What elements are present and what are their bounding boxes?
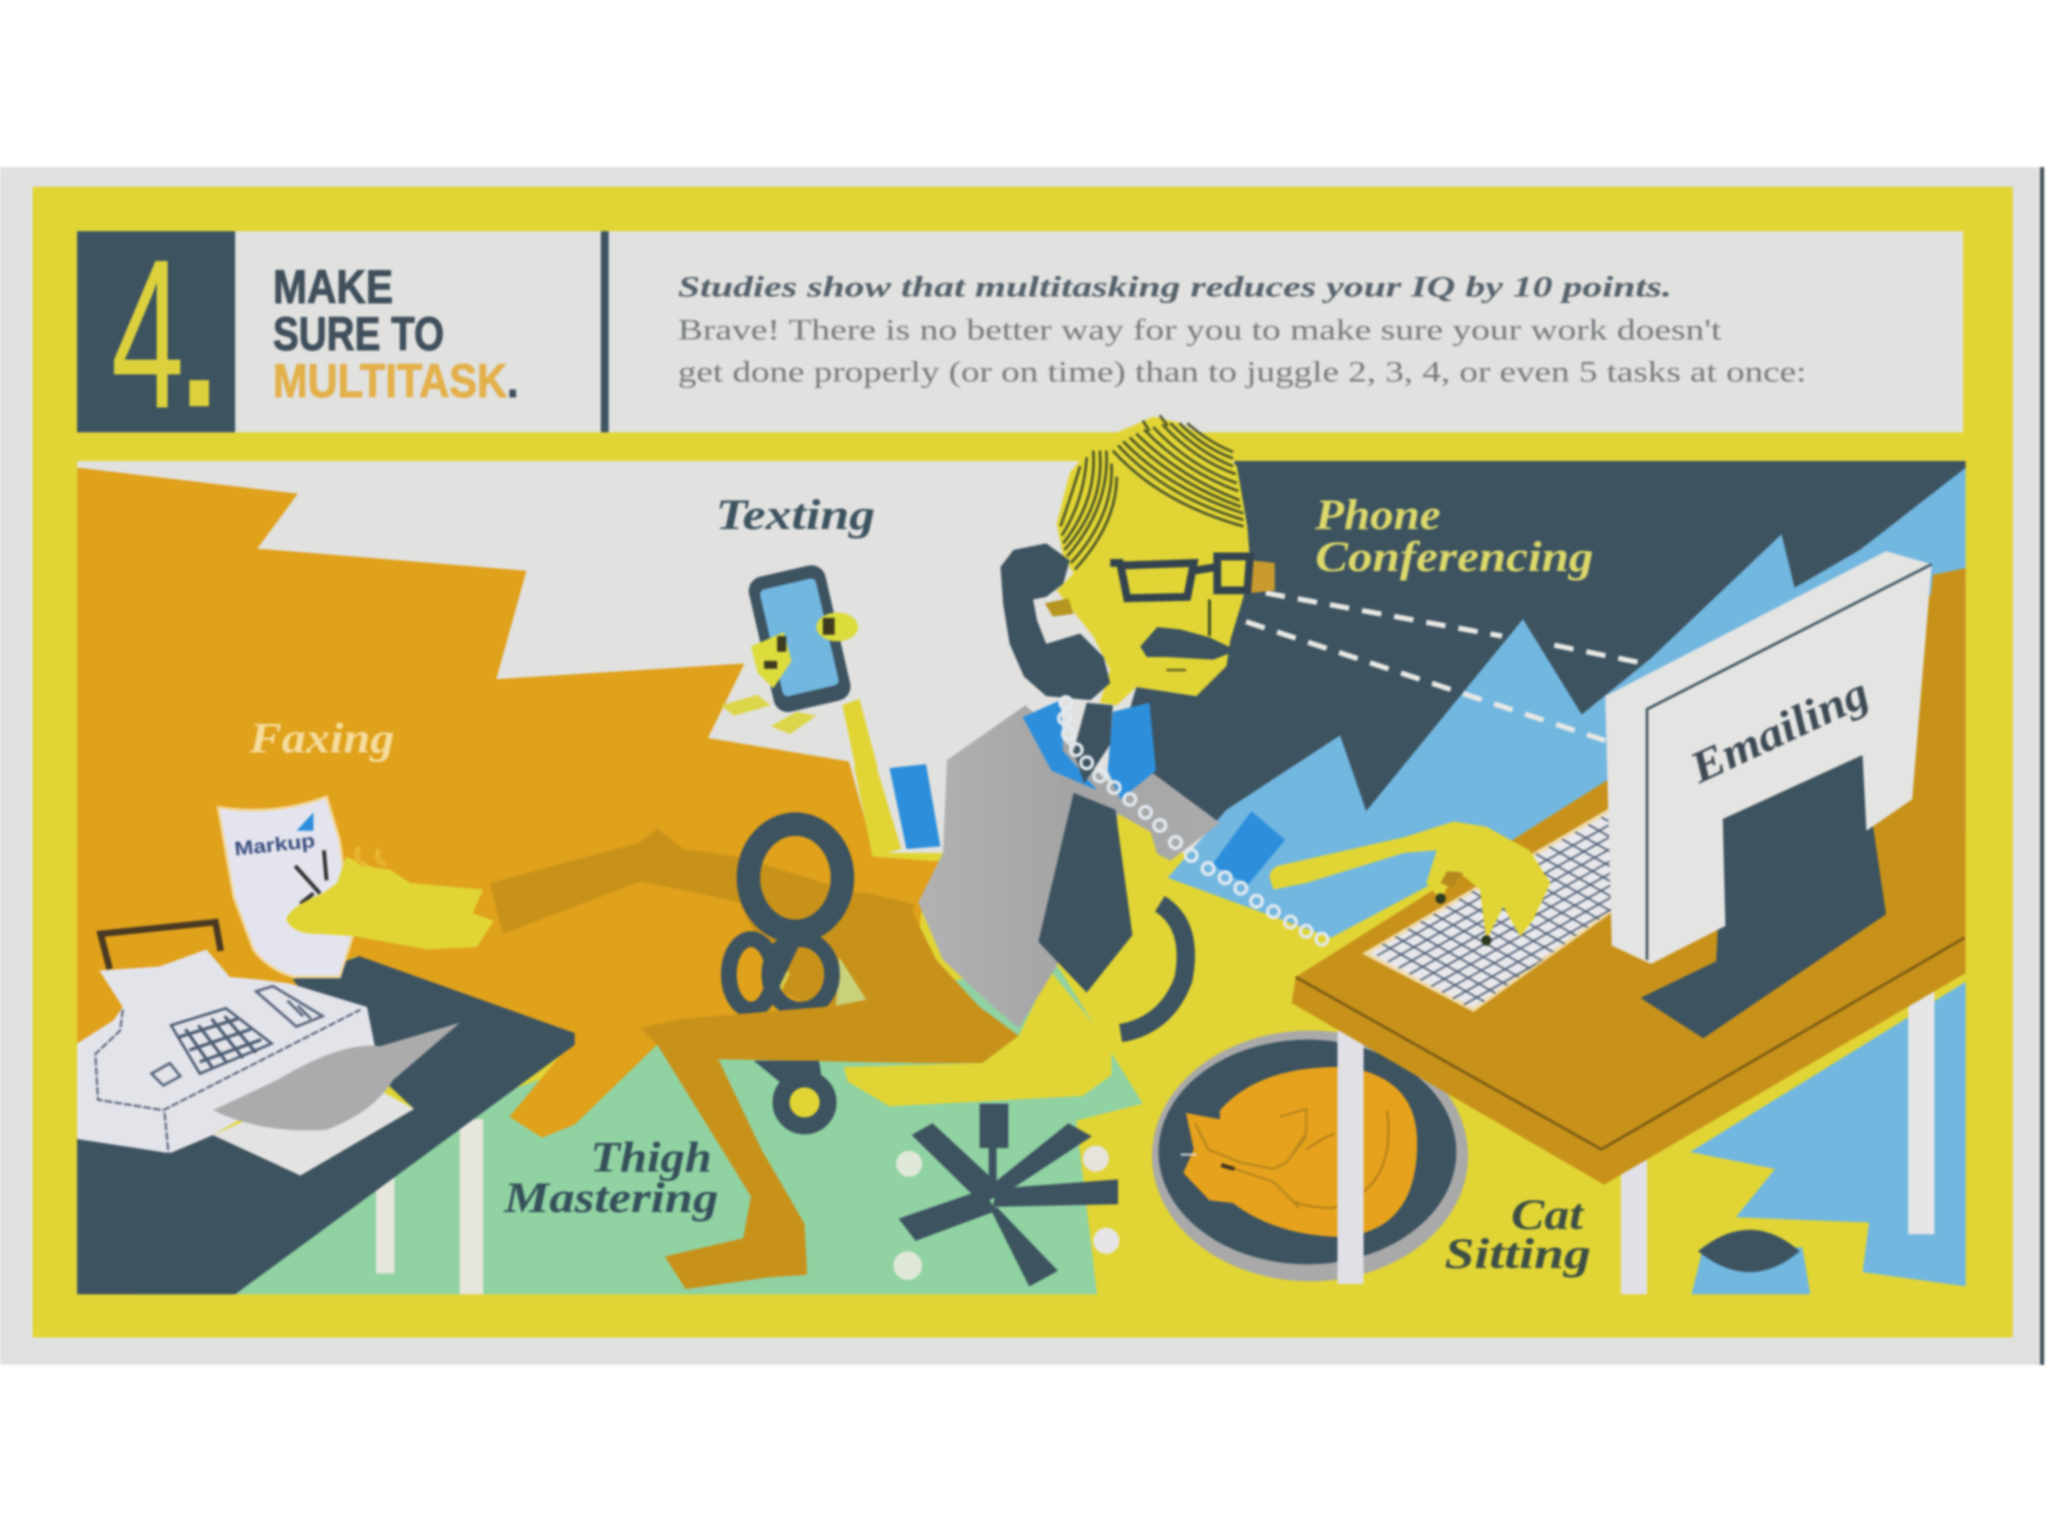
intro text: Brave! There is no better way for you to make sure your work doesn't xyxy=(678,314,1722,347)
cat bed and cat xyxy=(1152,1031,1468,1281)
nose and moustache xyxy=(1208,600,1211,636)
fax display xyxy=(256,986,323,1027)
phone handset xyxy=(1000,543,1110,700)
computer stand xyxy=(1640,755,1886,1038)
foot xyxy=(286,846,494,950)
label: Cat Sitting: Cat xyxy=(1511,1192,1585,1239)
heading: MULTITASK. xyxy=(273,354,519,407)
label: Cat Sitting: Sitting xyxy=(1445,1231,1591,1278)
yellow shirt side xyxy=(1116,813,1158,854)
label: Emailing: Emailing xyxy=(1681,667,1876,793)
illustration xyxy=(76,415,1967,1294)
smartphone and fingers xyxy=(721,562,858,734)
glasses xyxy=(1110,556,1250,598)
torso xyxy=(918,705,1220,1028)
label: Thigh Mastering: Mastering xyxy=(503,1175,718,1222)
dashed sight lines xyxy=(1246,593,1638,741)
heading: SURE TO xyxy=(273,307,444,360)
heading xyxy=(273,260,519,407)
desk top xyxy=(1292,575,1966,1185)
label: Phone Conferencing: Phone xyxy=(1314,492,1441,539)
blue floor patch xyxy=(1690,981,1967,1287)
backdrop orange wall xyxy=(77,468,947,1138)
faxed paper xyxy=(218,797,353,977)
fax machine xyxy=(77,922,460,1176)
table leg back xyxy=(1908,980,1934,1234)
upper thigh xyxy=(490,828,914,1019)
seated leg xyxy=(640,892,1019,1289)
heading: MAKE xyxy=(273,260,393,313)
label: Faxing: Faxing xyxy=(248,715,394,762)
right page edge xyxy=(2040,167,2044,1365)
left desk xyxy=(76,956,575,1294)
right sleeve xyxy=(1212,811,1285,886)
hair xyxy=(1061,415,1243,569)
blue mountains xyxy=(1168,468,1966,938)
fax outlines xyxy=(95,1010,360,1153)
intro text xyxy=(678,270,1806,388)
left sleeve and arm xyxy=(842,699,940,857)
keyboard xyxy=(1362,808,1612,1013)
label: Thigh Mastering: Thigh xyxy=(590,1135,712,1182)
chair base xyxy=(893,1104,1119,1287)
thigh master xyxy=(729,824,869,1010)
chair seat xyxy=(844,970,1112,1106)
number badge: 4 xyxy=(111,216,184,454)
label: Phone Conferencing xyxy=(1314,492,1593,581)
intro text: get done properly (or on time) than to juggle 2, 3, 4, or even 5 tasks at once: xyxy=(678,355,1806,388)
yellow frame xyxy=(33,187,2013,1337)
thigh master lower ring xyxy=(754,1061,828,1126)
table legs right xyxy=(1337,1031,1647,1294)
intro text: Studies show that multitasking reduces your IQ by 10 points. xyxy=(678,270,1672,303)
fax printed sheet xyxy=(213,1023,460,1130)
cat food bowl xyxy=(1691,1230,1810,1294)
label: Texting: Texting xyxy=(716,492,875,539)
label: Cat Sitting xyxy=(1445,1192,1591,1278)
dark night sky xyxy=(1123,461,1966,836)
man's collar xyxy=(1023,700,1156,799)
divider xyxy=(601,231,609,432)
desk back edge xyxy=(1929,566,1968,596)
tie xyxy=(1038,793,1132,993)
faxed paper: Markup xyxy=(233,830,316,860)
header panel xyxy=(77,216,1963,454)
telephone base cable xyxy=(1121,904,1186,1033)
fax keypad xyxy=(171,1008,272,1074)
paper background xyxy=(0,167,2040,1365)
phone cord xyxy=(1059,697,1328,945)
right arm and hand xyxy=(1270,822,1550,946)
green floor xyxy=(131,967,1143,1294)
head xyxy=(1045,415,1275,705)
backdrop paper xyxy=(76,460,1236,854)
label: Phone Conferencing: Conferencing xyxy=(1315,534,1593,581)
fax paper tray xyxy=(213,1091,414,1176)
label: Thigh Mastering xyxy=(503,1135,718,1222)
monitor xyxy=(1605,551,1932,964)
